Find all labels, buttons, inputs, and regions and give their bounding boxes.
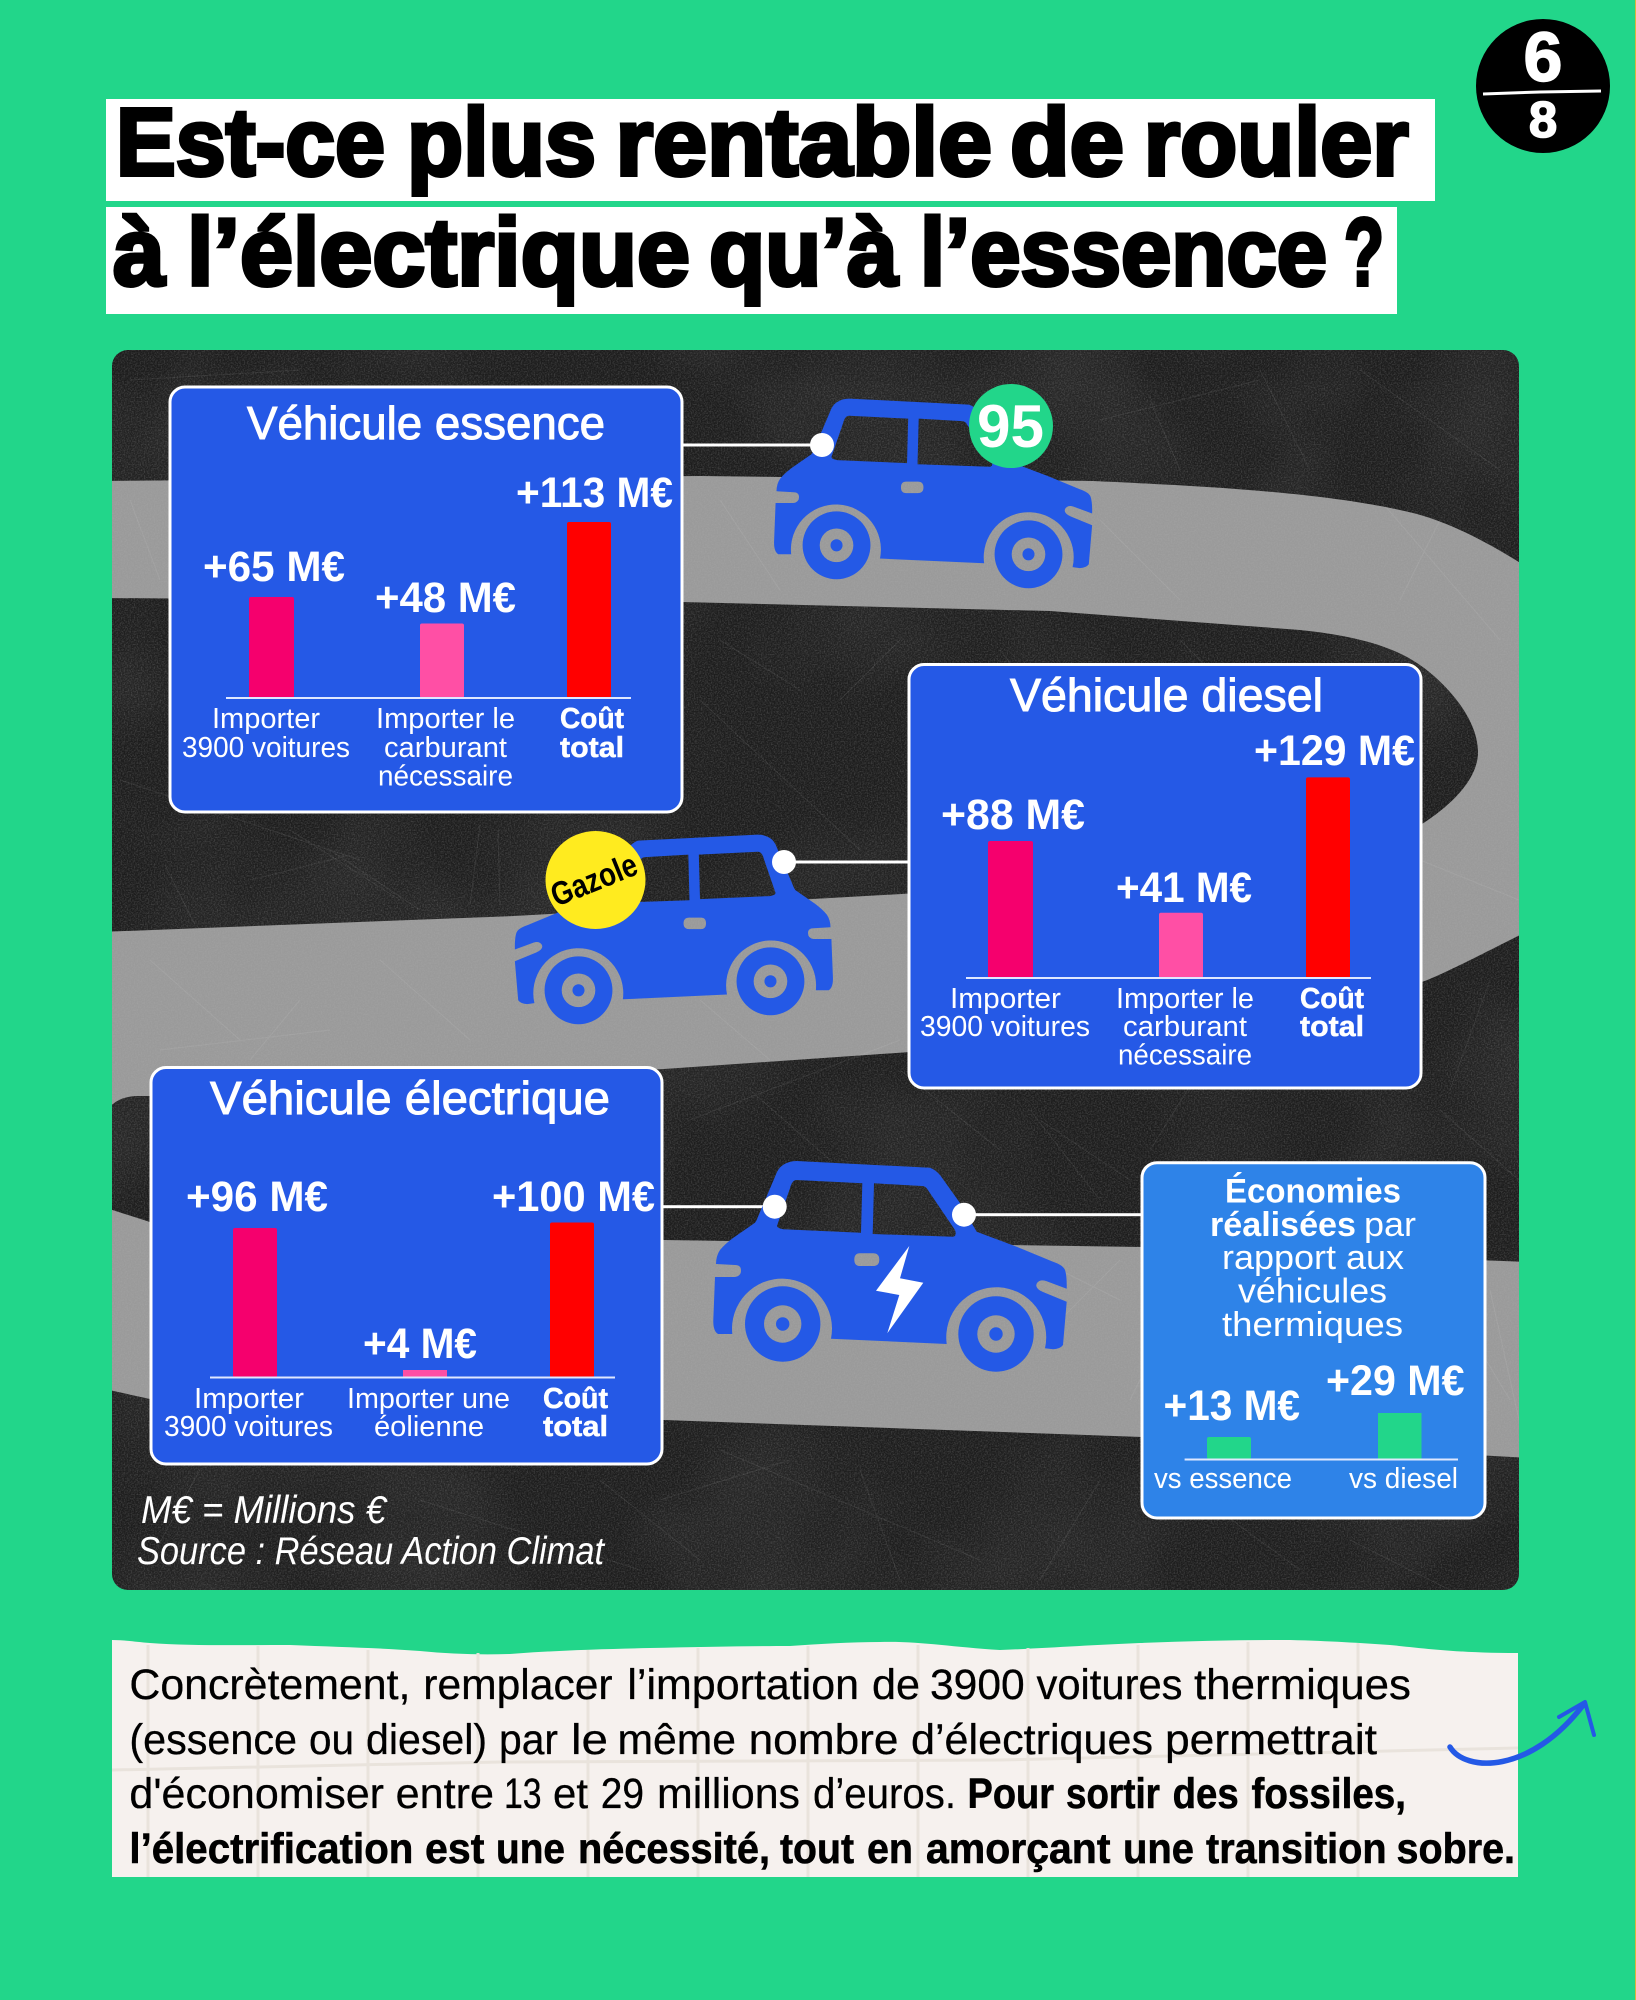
bar chart: électrique: Importer — [194, 1383, 304, 1415]
badge: 95 — [969, 384, 1053, 468]
heading: économies — [1210, 1173, 1416, 1344]
source note: Source : Réseau Action Climat — [137, 1530, 606, 1573]
text block: conclusion on torn paper: est — [425, 1825, 484, 1873]
text block: conclusion on torn paper: transition — [1206, 1825, 1387, 1873]
text block: conclusion on torn paper: d'économiser — [129, 1770, 384, 1818]
bar chart: diesel: +129 M€ — [1254, 727, 1415, 775]
bar chart: essence: +65 M€ — [203, 543, 345, 591]
bar chart: économies: +13 M€ — [1164, 1382, 1300, 1430]
text block: conclusion on torn paper: diesel) — [366, 1716, 487, 1764]
text block: conclusion on torn paper: le — [571, 1716, 608, 1764]
road: top band, bend and middle band — [100, 476, 1530, 1125]
title: l’électrique — [187, 199, 690, 306]
text block: conclusion on torn paper: permettrait — [1165, 1716, 1377, 1764]
text block: conclusion on torn paper: Pour — [968, 1770, 1054, 1818]
heading: électrique: Véhicule électrique — [210, 1072, 610, 1124]
heading: économies: par — [1364, 1206, 1416, 1244]
bar chart: électrique: Coût — [543, 1383, 608, 1415]
text block: conclusion on torn paper: remplacer — [423, 1661, 613, 1709]
text block: conclusion on torn paper: tout — [780, 1825, 854, 1873]
connector dots: électrique — [763, 1195, 1142, 1227]
panel: dark road background — [100, 350, 1530, 1590]
bar chart: essence: +48 M€ — [375, 574, 516, 622]
page badge: 6 of 8: 8 — [1529, 91, 1557, 148]
heading: essence: Véhicule essence — [247, 397, 605, 449]
bar chart: essence — [182, 469, 673, 792]
title: Est-ce — [116, 89, 385, 196]
text block: conclusion on torn paper: par — [499, 1716, 558, 1764]
arrow — [1450, 1702, 1594, 1763]
bar chart: essence: +113 M€ — [516, 469, 673, 517]
bar chart: économies: vs essence — [1154, 1463, 1292, 1495]
bar chart: économies: vs diesel — [1349, 1463, 1458, 1495]
text block: conclusion on torn paper: Concrètement, — [129, 1661, 410, 1709]
text block: conclusion on torn paper: de — [872, 1661, 920, 1709]
bar chart: diesel: Coût — [1300, 983, 1364, 1015]
bar chart: essence: Coût — [560, 703, 624, 735]
panel: véhicule diesel — [909, 664, 1421, 1088]
text block: conclusion on torn paper: d’euros. — [813, 1770, 956, 1818]
panel: véhicule électrique — [151, 1068, 662, 1464]
bar chart: essence: Importer — [212, 703, 320, 735]
heading: économies: rapport aux — [1222, 1239, 1404, 1277]
bar chart: électrique: éolienne — [374, 1411, 484, 1443]
page badge: 6 of 8: 6 — [1524, 18, 1562, 96]
heading: économies: réalisées — [1210, 1206, 1356, 1244]
badge: gazole: Gazole — [545, 846, 642, 914]
bar chart: diesel: Importer le — [1116, 983, 1254, 1015]
bar chart: électrique: 3900 voitures — [164, 1411, 333, 1443]
bar chart: diesel: Importer — [950, 983, 1061, 1015]
title: qu’à — [709, 199, 899, 306]
connector: essence — [682, 444, 822, 446]
text block: conclusion on torn paper: 3900 — [930, 1661, 1025, 1709]
page badge: 6 of 8 — [1476, 18, 1610, 153]
text block: conclusion on torn paper: une — [496, 1825, 565, 1873]
bar chart: électrique: Importer une — [347, 1383, 510, 1415]
bar chart: électrique: total — [543, 1411, 608, 1443]
title: l’essence — [920, 199, 1327, 306]
bar chart: électrique — [164, 1173, 655, 1443]
heading: économies: véhicules — [1238, 1273, 1387, 1311]
text block: conclusion on torn paper: même — [618, 1716, 736, 1764]
bar chart: électrique: +100 M€ — [492, 1173, 655, 1221]
bar chart: essence: 3900 voitures — [182, 732, 350, 764]
icon: electric car — [713, 1161, 1067, 1372]
text block: conclusion on torn paper: des — [1173, 1770, 1239, 1818]
text block: conclusion on torn paper: 29 — [601, 1770, 644, 1818]
text block: conclusion on torn paper: une — [1123, 1825, 1194, 1873]
text block: conclusion on torn paper: et — [553, 1770, 588, 1818]
text block: conclusion on torn paper: en — [867, 1825, 913, 1873]
title: ? — [1344, 199, 1384, 306]
bar chart: électrique: +4 M€ — [363, 1320, 477, 1368]
bar chart: diesel: nécessaire — [1118, 1040, 1252, 1072]
source note — [137, 1489, 606, 1573]
bar chart: électrique: +96 M€ — [186, 1173, 328, 1221]
connector dot: diesel — [772, 850, 796, 874]
text block: conclusion on torn paper: voitures — [1036, 1661, 1182, 1709]
icon: essence car — [774, 399, 1092, 588]
text block: conclusion on torn paper: sortir — [1066, 1770, 1160, 1818]
icon: diesel car — [515, 835, 833, 1024]
bar chart: diesel — [920, 727, 1415, 1072]
title: rentable — [616, 89, 992, 196]
bar chart: essence: Importer le — [376, 703, 515, 735]
panel: véhicule essence — [170, 387, 682, 812]
bar chart: essence: carburant — [384, 732, 507, 764]
title: plus — [407, 89, 596, 196]
text block: conclusion on torn paper: ou — [309, 1716, 354, 1764]
title: rouler — [1144, 89, 1409, 196]
bar chart: diesel: +88 M€ — [941, 791, 1085, 839]
road: lower band — [100, 1206, 1530, 1458]
bar chart: diesel: total — [1300, 1011, 1364, 1043]
text block: conclusion on torn paper: sobre. — [1396, 1825, 1515, 1873]
bar chart: économies — [1154, 1357, 1465, 1495]
text block: conclusion on torn paper: d’électriques — [911, 1716, 1153, 1764]
text block: conclusion on torn paper: thermiques — [1194, 1661, 1411, 1709]
text block: conclusion on torn paper: millions — [657, 1770, 800, 1818]
text block: conclusion on torn paper: entre — [396, 1770, 494, 1818]
source note: M€ = Millions € — [141, 1489, 388, 1532]
text block: conclusion on torn paper — [112, 1640, 1518, 1877]
text block: conclusion on torn paper: nombre — [749, 1716, 898, 1764]
panel: économies réalisées — [1142, 1163, 1485, 1518]
bar chart: diesel: carburant — [1123, 1011, 1247, 1043]
heading: diesel: Véhicule diesel — [1010, 669, 1323, 721]
text block: conclusion on torn paper: fossiles, — [1252, 1770, 1406, 1818]
bar chart: économies: +29 M€ — [1326, 1357, 1465, 1405]
connector dot: essence — [810, 433, 834, 457]
text block: conclusion on torn paper: 13 — [504, 1770, 542, 1818]
title — [106, 89, 1435, 314]
bar chart: essence: nécessaire — [378, 760, 513, 792]
badge: gazole — [545, 831, 646, 929]
heading: économies: Économies — [1225, 1173, 1401, 1211]
title: de — [1010, 89, 1124, 196]
bar chart: essence: total — [560, 732, 624, 764]
bar chart: diesel: 3900 voitures — [920, 1011, 1090, 1043]
bar chart: diesel: +41 M€ — [1116, 864, 1252, 912]
text block: conclusion on torn paper: amorçant — [926, 1825, 1110, 1873]
text block: conclusion on torn paper: l’électrification — [129, 1825, 413, 1873]
heading: économies: thermiques — [1222, 1306, 1403, 1344]
text block: conclusion on torn paper: nécessité, — [578, 1825, 770, 1873]
text block: conclusion on torn paper: (essence — [129, 1716, 297, 1764]
text block: conclusion on torn paper: l’importation — [627, 1661, 859, 1709]
connector: électrique — [662, 1205, 775, 1208]
badge: 95: 95 — [977, 393, 1044, 460]
title: à — [113, 199, 166, 306]
connector: diesel — [784, 860, 909, 864]
